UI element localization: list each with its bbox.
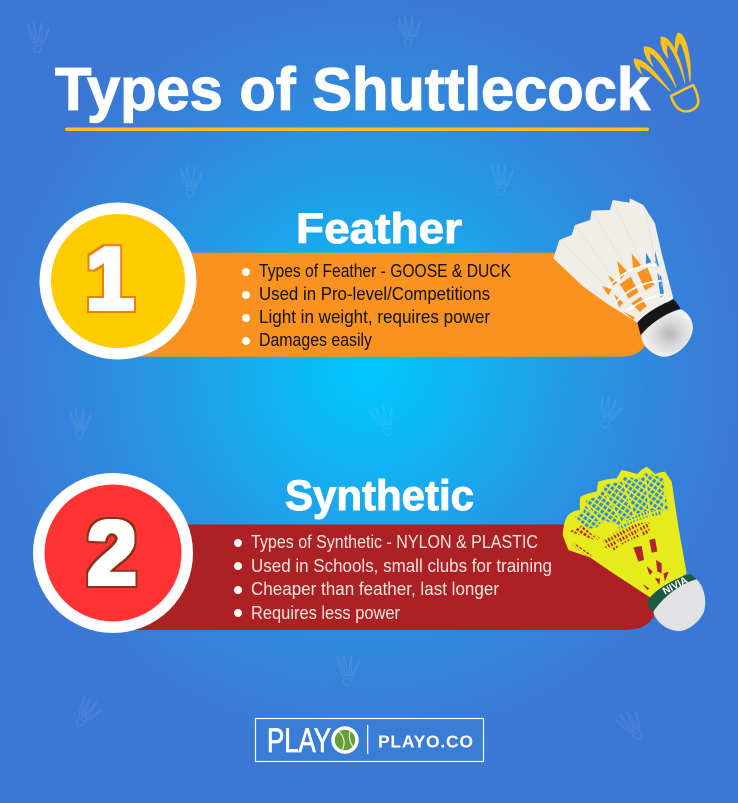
panel: feather	[40, 198, 693, 360]
synthetic bullet list: Cheaper than feather, last longer	[251, 579, 499, 599]
feather bullet list	[242, 261, 511, 350]
brand band text: NIVIA	[661, 575, 690, 597]
feather bullet list: Types of Feather - GOOSE & DUCK	[259, 261, 511, 281]
feather shuttlecock	[553, 198, 693, 357]
feather bullet list: Damages easily	[259, 330, 372, 350]
synthetic bar	[125, 524, 657, 630]
heading: feather: Feather	[296, 205, 462, 253]
panel: synthetic	[33, 467, 705, 633]
title underline	[65, 128, 649, 131]
heading: synthetic: Synthetic	[285, 472, 474, 520]
feather bar	[130, 253, 650, 357]
logo url: PLAYO.CO	[378, 732, 473, 752]
number circle 1	[40, 202, 196, 360]
synthetic bullet list	[234, 532, 552, 623]
title: Types of Shuttlecock	[55, 56, 651, 123]
background shuttlecock icons	[28, 16, 650, 743]
logo	[256, 718, 484, 762]
feather bullet list: Used in Pro-level/Competitions	[259, 284, 490, 304]
number circle 1: 1	[86, 229, 134, 328]
icon: yellow shuttlecock	[634, 33, 698, 111]
synthetic shuttlecock	[563, 467, 705, 631]
number circle 2	[33, 473, 193, 633]
logo ball	[333, 728, 357, 752]
feather bullet list: Light in weight, requires power	[259, 307, 490, 327]
synthetic bullet list: Types of Synthetic - NYLON & PLASTIC	[251, 532, 538, 552]
number circle 2: 2	[87, 504, 137, 604]
synthetic bullet list: Used in Schools, small clubs for training	[251, 556, 552, 576]
synthetic bullet list: Requires less power	[251, 603, 400, 623]
logo wordmark: PLAY	[267, 722, 331, 760]
